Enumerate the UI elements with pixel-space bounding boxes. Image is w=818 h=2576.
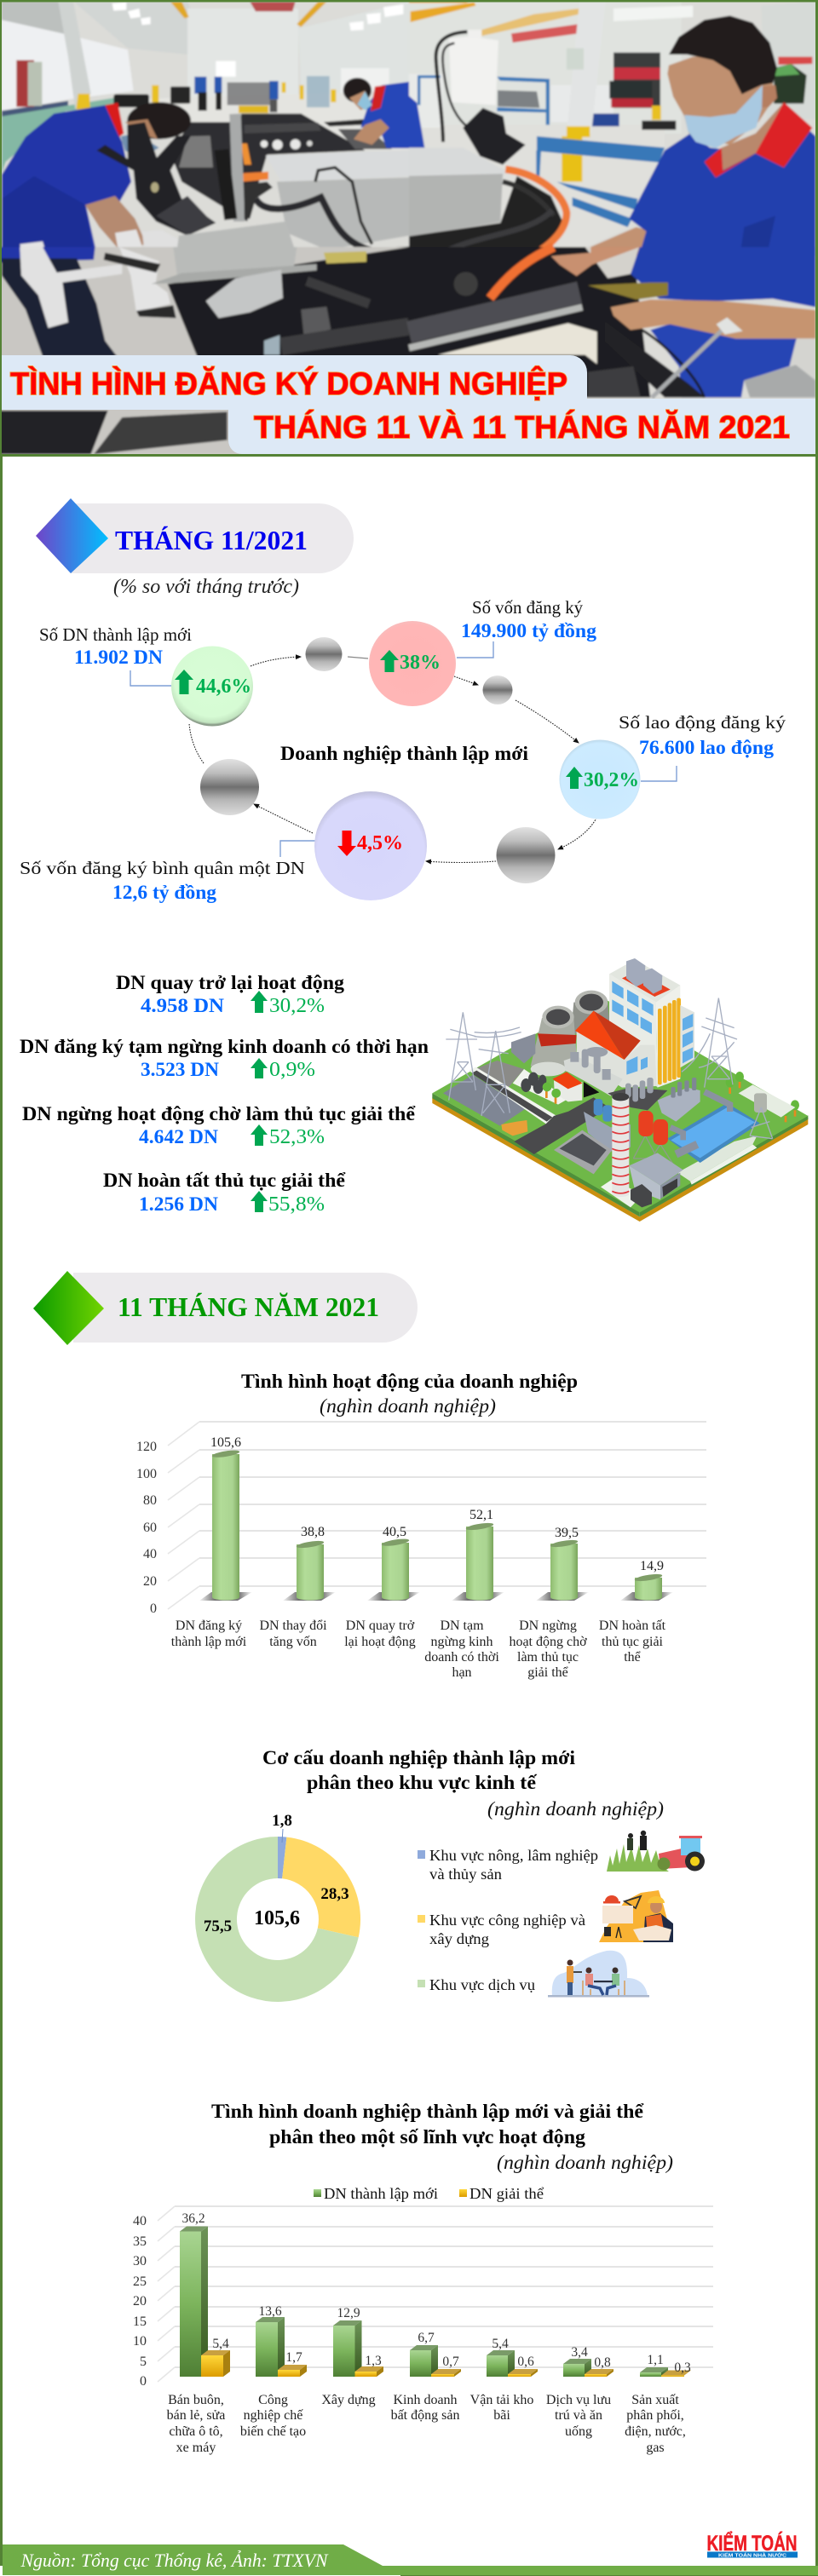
category labels: bãi — [493, 2408, 510, 2423]
category labels: làm thủ tục — [517, 1650, 579, 1665]
hero photo: workers assembling electric bus chassis — [0, 0, 818, 460]
bars: transport and warehousing — [487, 2337, 538, 2377]
logo: Kiểm Toán: KIỂM TOÁN NHÀ NƯỚC — [718, 2552, 786, 2559]
icon: construction engineer — [599, 1890, 673, 1942]
y axis labels: 80 — [143, 1493, 157, 1508]
icon: tractor and farm workers — [607, 1831, 705, 1872]
chart legend: new and dissolved: DN thành lập mới — [324, 2185, 438, 2202]
bars: manufacturing — [256, 2304, 307, 2377]
chart title: sector structure: (nghìn doanh nghiệp) — [487, 1798, 664, 1820]
bar: newly registered 105,6 — [199, 1435, 252, 1601]
factory: trees — [543, 1072, 799, 1122]
bars: accommodation and food: 3,4 — [571, 2345, 588, 2360]
bars: power, water, gas — [640, 2353, 691, 2377]
category labels: DN đăng ký — [176, 1619, 242, 1633]
cycle diagram: new enterprises — [20, 597, 786, 903]
donut chart: sector structure: 28,3 — [320, 1885, 349, 1903]
bar: dissolved 14,9 — [620, 1559, 673, 1601]
connector arrows — [189, 657, 602, 862]
chart title: sector structure — [262, 1747, 664, 1820]
category labels: bất động sản — [391, 2408, 459, 2423]
category labels: DN thay đổi — [259, 1619, 327, 1633]
photo: middle worker — [360, 82, 409, 148]
label: registered labour: Số lao động đăng ký — [619, 712, 786, 733]
bars: construction: 12,9 — [337, 2306, 360, 2320]
bar: awaiting dissolution 39,5 — [536, 1526, 589, 1601]
bar chart: new and dissolved by field — [133, 2206, 713, 2455]
category labels: thành lập mới — [171, 1635, 247, 1649]
category labels — [171, 1619, 666, 1680]
label: registered capital — [461, 597, 597, 641]
stat: temporarily suspended: DN đăng ký tạm ngừng kinh doanh có thời hạn — [20, 1036, 429, 1057]
factory: red tanks — [633, 1136, 673, 1164]
chart title: enterprise activity: (nghìn doanh nghiệp) — [320, 1395, 496, 1417]
bar: capital increase 38,8: 38,8 — [301, 1525, 325, 1539]
factory: power pool — [667, 1103, 760, 1163]
category labels: thể — [624, 1650, 642, 1665]
category labels: Vận tải kho — [470, 2393, 533, 2407]
y axis labels — [133, 2214, 147, 2389]
section heading: Tháng 11/2021 — [36, 498, 354, 573]
illustration: isometric industrial park — [432, 958, 808, 1222]
category labels: Công — [258, 2393, 288, 2407]
bars: power, water, gas: 1,1 — [647, 2353, 664, 2367]
y axis labels: 20 — [133, 2294, 147, 2309]
category labels: gas — [646, 2441, 665, 2455]
bubble: new enterprises +44,6% — [171, 646, 253, 726]
y axis labels: 15 — [133, 2314, 147, 2329]
category labels: chữa ô tô, — [169, 2424, 223, 2439]
y axis labels: 100 — [136, 1467, 157, 1481]
bar: newly registered 105,6: 105,6 — [210, 1435, 241, 1450]
category labels: lại hoạt động — [344, 1635, 416, 1649]
bubble: average capital -4,5%: 4,5% — [357, 832, 403, 854]
stat: returned to operation: 4.958 DN — [141, 995, 224, 1016]
stat: returned to operation: DN quay trở lại hoạt động — [116, 972, 345, 993]
factory: transformer building — [629, 1153, 683, 1186]
stat rows — [20, 972, 429, 1216]
donut chart: sector structure: 105,6 — [254, 1907, 300, 1929]
category labels: hạn — [452, 1665, 472, 1680]
stat: completed dissolution: 55,8% — [268, 1193, 325, 1216]
photo: lower right arm, radiator and shirt — [409, 247, 815, 398]
bubble: registered labour +30,2% — [559, 739, 641, 819]
photo: right worker shirt — [629, 129, 815, 256]
category labels: biến chế tạo — [240, 2424, 306, 2439]
y axis labels: 0 — [150, 1601, 157, 1616]
stat: awaiting dissolution — [22, 1103, 416, 1148]
category labels: giải thể — [527, 1665, 569, 1680]
y axis labels: 40 — [133, 2214, 147, 2228]
factory: pipes — [705, 1092, 730, 1112]
category labels — [167, 2393, 686, 2455]
legend: agriculture sector — [418, 1847, 598, 1883]
stat: completed dissolution: 1.256 DN — [139, 1193, 218, 1215]
y axis labels: 25 — [133, 2274, 147, 2289]
label: average capital — [20, 858, 305, 903]
grey ball 1 — [305, 637, 343, 671]
y axis labels: 5 — [140, 2355, 147, 2369]
category labels: điện, nước, — [625, 2424, 686, 2439]
category labels: Bán buôn, — [168, 2393, 224, 2407]
bars: construction — [333, 2306, 383, 2377]
chart title: sector fields — [211, 2101, 673, 2173]
factory: substation — [658, 1088, 700, 1122]
section heading: Tháng 11/2021: THÁNG 11/2021 — [115, 526, 308, 555]
bars: construction: 1,3 — [365, 2354, 382, 2368]
section heading: 11 tháng năm 2021 — [33, 1271, 418, 1345]
bars: accommodation and food — [563, 2345, 614, 2377]
chart title: sector structure: Cơ cấu doanh nghiệp thành lập mới — [262, 1747, 576, 1768]
grey ball 3 — [496, 827, 556, 883]
legend: industry and construction: xây dựng — [429, 1930, 489, 1947]
callout lines — [130, 641, 677, 857]
stat: awaiting dissolution: 52,3% — [269, 1126, 325, 1148]
category labels: DN ngừng — [519, 1619, 577, 1633]
bars: power, water, gas: 0,3 — [674, 2360, 691, 2375]
donut chart: sector structure: 75,5 — [204, 1918, 232, 1935]
category labels: ngừng kinh — [430, 1635, 493, 1649]
hero title banner: TÌNH HÌNH ĐĂNG KÝ DOANH NGHIỆP — [10, 365, 567, 401]
legend: services: Khu vực dịch vụ — [429, 1976, 535, 1993]
factory: grey block and machines — [584, 1112, 631, 1152]
category labels: xe máy — [176, 2441, 216, 2455]
label: registered labour: 76.600 lao động — [639, 737, 775, 758]
category labels: Sản xuất — [631, 2393, 679, 2407]
bars: manufacturing: 1,7 — [285, 2350, 302, 2365]
donut chart: sector structure — [195, 1812, 360, 2002]
factory: dark pad and insulators — [608, 1088, 667, 1110]
photo: coolant bottle and hoses — [449, 37, 498, 105]
label: average capital: 12,6 tỷ đồng — [112, 882, 217, 903]
y axis labels — [136, 1440, 157, 1616]
bar: returned 40,5: 40,5 — [383, 1525, 406, 1539]
chart title: enterprise activity — [241, 1371, 578, 1417]
note: compared with previous month: (% so với tháng trước) — [113, 576, 299, 598]
photo: chassis frame — [170, 113, 365, 221]
category labels: nghiệp chế — [244, 2408, 303, 2423]
bars: transport and warehousing: 0,6 — [517, 2355, 534, 2369]
bar: returned 40,5 — [367, 1525, 420, 1601]
bubble: registered labour +30,2%: 30,2% — [584, 769, 639, 791]
bubble: average capital -4,5% — [314, 791, 427, 900]
bars: real estate — [410, 2331, 461, 2377]
bar: awaiting dissolution 39,5: 39,5 — [555, 1526, 579, 1540]
stat: returned to operation: 30,2% — [269, 995, 325, 1017]
photo: head — [667, 57, 775, 145]
hero bottom border — [0, 0, 818, 457]
small link line — [348, 657, 368, 658]
category labels: DN tạm — [440, 1619, 484, 1633]
bars: manufacturing: 13,6 — [258, 2304, 282, 2319]
category labels: Kinh doanh — [393, 2393, 458, 2407]
factory: main hall with red roof — [577, 1031, 657, 1088]
photo: upper grey controller — [177, 221, 294, 248]
bars: real estate: 6,7 — [418, 2331, 435, 2345]
stat: completed dissolution — [103, 1170, 346, 1216]
photo: battery pack — [264, 154, 268, 158]
category labels: thủ tục giải — [602, 1635, 664, 1649]
factory: small house — [554, 1080, 582, 1101]
label: new enterprises: 11.902 DN — [74, 647, 163, 668]
photo: blue racks — [418, 75, 441, 105]
chart title: sector fields: (nghìn doanh nghiệp) — [497, 2152, 673, 2173]
bars: accommodation and food: 0,8 — [594, 2355, 611, 2370]
bar: dissolved 14,9: 14,9 — [640, 1559, 664, 1573]
footer source band — [3, 2544, 818, 2576]
category labels: uống — [565, 2424, 592, 2439]
factory: tower block — [609, 974, 658, 1088]
y axis labels: 30 — [133, 2254, 147, 2268]
donut chart: sector structure: 1,8 — [272, 1812, 292, 1830]
y axis labels: 35 — [133, 2234, 147, 2249]
category labels: hoạt động chờ — [509, 1635, 587, 1649]
bars: transport and warehousing: 5,4 — [492, 2337, 509, 2351]
photo: upper left factory hall and workers — [2, 2, 409, 256]
category labels: tăng vốn — [269, 1635, 317, 1649]
category labels: phân phối, — [626, 2408, 684, 2423]
y axis labels: 120 — [136, 1440, 157, 1454]
legend: agriculture sector: Khu vực nông, lâm nghiệp — [429, 1847, 598, 1864]
photo: worker edge — [409, 96, 424, 147]
photo: left worker — [2, 105, 131, 256]
bars: wholesale and retail — [180, 2211, 230, 2377]
category labels: Xây dựng — [321, 2393, 376, 2407]
category labels: bán lẻ, sửa — [167, 2408, 225, 2423]
chart title: sector fields: Tình hình doanh nghiệp thành lập mới và giải thể — [211, 2101, 644, 2122]
y axis labels: 10 — [133, 2334, 147, 2349]
stat: awaiting dissolution: DN ngừng hoạt động chờ làm thủ tục giải thể — [22, 1103, 416, 1124]
factory: barrels — [521, 1072, 546, 1094]
photo: lower left floor and pipes — [0, 247, 409, 454]
bars: wholesale and retail: 5,4 — [212, 2337, 229, 2351]
chart legend: new and dissolved — [314, 2185, 544, 2202]
bubble: new enterprises +44,6%: 44,6% — [196, 676, 251, 698]
footer source band: Nguồn: Tổng cục Thống kê, Ảnh: TTXVN — [20, 2550, 329, 2571]
stat: temporarily suspended — [20, 1036, 429, 1081]
legend: agriculture sector: và thủy sản — [429, 1866, 502, 1883]
bar: suspended 52,1: 52,1 — [469, 1508, 493, 1522]
icon: cafe service scene — [548, 1951, 649, 1997]
y axis labels: 20 — [143, 1574, 157, 1589]
factory: chimney — [612, 1096, 629, 1194]
bars: real estate: 0,7 — [442, 2355, 459, 2369]
section heading: 11 tháng năm 2021: 11 THÁNG NĂM 2021 — [118, 1292, 379, 1322]
hero title banner — [2, 355, 815, 454]
stat: awaiting dissolution: 4.642 DN — [139, 1126, 218, 1147]
stat: temporarily suspended: 0,9% — [269, 1059, 315, 1081]
bar: capital increase 38,8 — [283, 1525, 336, 1601]
photo: arm — [591, 227, 648, 256]
legend: industry and construction: Khu vực công nghiệp và — [429, 1912, 585, 1929]
centre label: Doanh nghiệp thành lập mới — [280, 743, 528, 765]
factory: cooling towers — [571, 1003, 611, 1033]
hero title banner: THÁNG 11 VÀ 11 THÁNG NĂM 2021 — [254, 410, 790, 445]
photo: upper right hall and worker — [409, 0, 818, 256]
photo: battery right part — [409, 147, 506, 181]
stat: temporarily suspended: 3.523 DN — [141, 1059, 219, 1080]
y axis labels: 60 — [143, 1521, 157, 1535]
stat: completed dissolution: DN hoàn tất thủ tục giải thể — [103, 1170, 346, 1191]
category labels: DN quay trở — [346, 1619, 415, 1633]
chart title: sector structure: phân theo khu vực kinh tế — [307, 1772, 538, 1793]
chart title: enterprise activity: Tình hình hoạt động của doanh nghiệp — [241, 1371, 578, 1392]
label: new enterprises: Số DN thành lập mới — [39, 624, 192, 645]
bubble: registered capital +38% — [369, 621, 456, 706]
category labels: DN hoàn tất — [599, 1619, 666, 1633]
category labels: doanh có thời — [424, 1650, 499, 1665]
bars: wholesale and retail: 36,2 — [181, 2211, 205, 2226]
chart legend: new and dissolved: DN giải thể — [469, 2185, 544, 2202]
chart title: sector fields: phân theo một số lĩnh vực hoạt động — [269, 2126, 586, 2148]
grey ball 2 — [482, 676, 513, 704]
label: average capital: Số vốn đăng ký bình quân một DN — [20, 858, 305, 878]
bar: suspended 52,1 — [452, 1508, 504, 1601]
label: registered labour — [619, 712, 786, 758]
photo: lower strip — [0, 411, 108, 454]
y axis labels: 40 — [143, 1547, 157, 1561]
legend: industry and construction — [418, 1912, 585, 1947]
label: registered capital: Số vốn đăng ký — [472, 597, 583, 618]
bar chart: enterprise activity — [136, 1422, 706, 1680]
grey ball 4 — [200, 759, 259, 815]
label: new enterprises — [39, 624, 192, 668]
stat: returned to operation — [116, 972, 345, 1017]
category labels: Dịch vụ lưu — [546, 2393, 611, 2407]
label: registered capital: 149.900 tỷ đồng — [461, 620, 597, 641]
category labels: trú và ăn — [555, 2408, 602, 2423]
factory: pylons — [446, 998, 773, 1139]
bubble: registered capital +38%: 38% — [400, 652, 441, 674]
factory: blue tanks — [594, 1099, 602, 1115]
y axis labels: 0 — [140, 2374, 147, 2389]
